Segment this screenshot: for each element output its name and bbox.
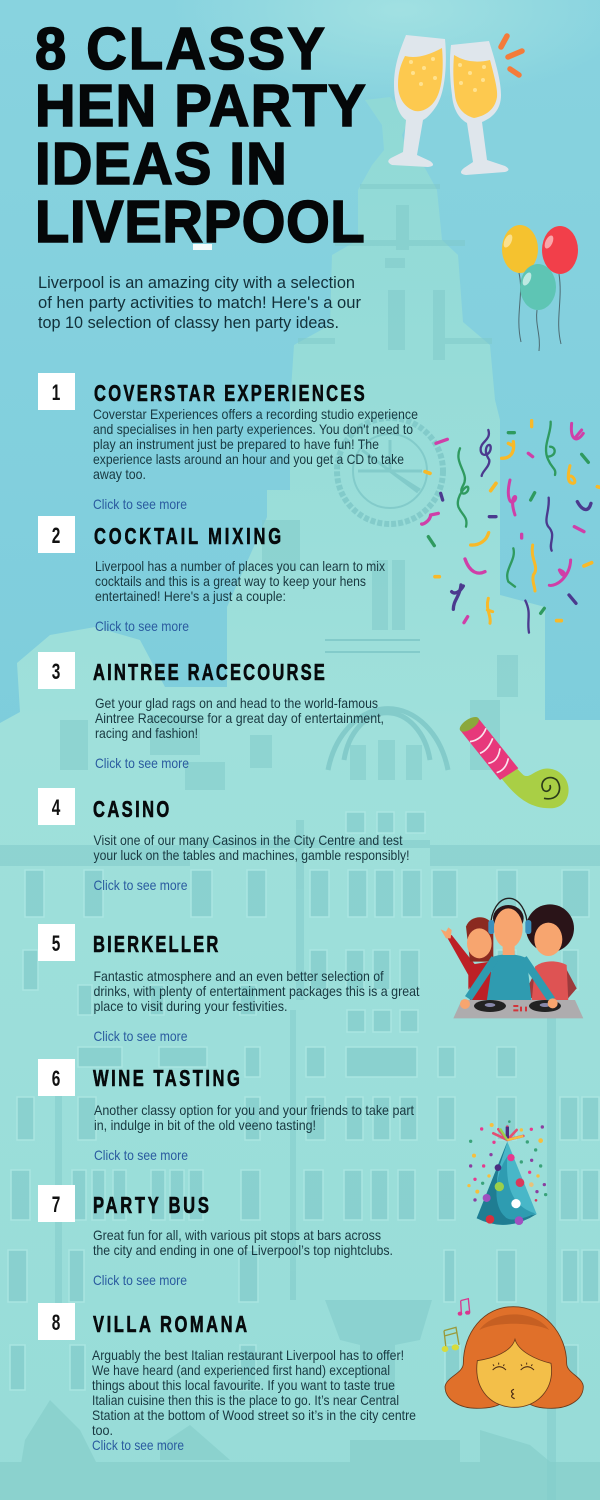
panel: 6 Wine Tasting xyxy=(38,1059,414,1163)
panel: 2 Cocktail Mixing: COCKTAIL MIXING xyxy=(94,524,281,550)
panel: 8 Villa Romana: Arguably the best Italian restaurant Liverpool has to offer! xyxy=(92,1348,404,1363)
title xyxy=(35,17,366,255)
panel: 5 Bierkeller: Fantastic atmosphere and an even better selection of xyxy=(94,969,384,984)
panel: 4 Casino: CASINO xyxy=(93,797,169,823)
panel: 7 Party Bus: PARTY BUS xyxy=(93,1193,209,1219)
panel: 8 Villa Romana: VILLA ROMANA xyxy=(93,1312,247,1338)
panel: 3 Aintree Racecourse: racing and fashion! xyxy=(95,726,198,741)
panel: 6 Wine Tasting: Click to see more xyxy=(94,1148,188,1163)
panel: 7 Party Bus: Click to see more xyxy=(93,1273,187,1288)
panel: 1 Coverstar Experiences: play an instrument just be prepared to have fun! The xyxy=(93,437,379,452)
panel: 3 Aintree Racecourse: Get your glad rags on and head to the world-famous xyxy=(95,696,378,711)
intro text: top 10 selection of classy hen party ideas. xyxy=(38,313,339,332)
panel: 3 Aintree Racecourse: 3 xyxy=(52,660,60,685)
panel: 7 Party Bus xyxy=(38,1185,393,1288)
panel: 1 Coverstar Experiences: 1 xyxy=(52,381,61,406)
icon: party hat xyxy=(467,1120,547,1225)
intro text: of hen party activities to match! Here's a our xyxy=(38,293,361,312)
panel: 2 Cocktail Mixing: Liverpool has a number of places you can learn to mix xyxy=(95,559,385,574)
panel: 2 Cocktail Mixing xyxy=(38,516,385,634)
panel: 8 Villa Romana: 8 xyxy=(52,1311,60,1336)
panel: 6 Wine Tasting: in, indulge in bit of the old veeno tasting! xyxy=(94,1118,316,1133)
panel: 5 Bierkeller: 5 xyxy=(52,932,61,957)
panel: 5 Bierkeller: BIERKELLER xyxy=(93,932,219,958)
panel: 1 Coverstar Experiences: COVERSTAR EXPERIENCES xyxy=(94,381,365,407)
panel: 1 Coverstar Experiences: away too. xyxy=(93,467,146,482)
panel: 2 Cocktail Mixing: 2 xyxy=(52,524,60,549)
panel: 5 Bierkeller: Click to see more xyxy=(94,1029,188,1044)
panel: 6 Wine Tasting: 6 xyxy=(52,1067,60,1092)
title: LIVERPOOL xyxy=(35,190,365,255)
bottom trees and railings xyxy=(0,1400,600,1500)
panel: 1 Coverstar Experiences: Click to see more xyxy=(93,497,187,512)
panel: 1 Coverstar Experiences xyxy=(38,373,418,512)
panel: 7 Party Bus: 7 xyxy=(52,1193,60,1218)
icon: party blower xyxy=(457,714,569,808)
title: HEN PARTY xyxy=(35,74,366,139)
panel: 8 Villa Romana: We have heard (and experienced first hand) exceptional xyxy=(92,1363,390,1378)
title: 8 CLASSY xyxy=(35,17,325,82)
panel: 4 Casino: your luck on the tables and machines, gamble responsibly! xyxy=(94,848,410,863)
panel: 5 Bierkeller: place to visit during your festivities. xyxy=(94,999,288,1014)
panel: 2 Cocktail Mixing: Click to see more xyxy=(95,619,189,634)
panel: 2 Cocktail Mixing: entertained! Here's a just a couple: xyxy=(95,589,286,604)
panel: 7 Party Bus: Great fun for all, with various pit stops at bars across xyxy=(93,1228,381,1243)
panel: 3 Aintree Racecourse: AINTREE RACECOURSE xyxy=(93,660,325,686)
panel: 8 Villa Romana: things about this local favourite. If you want to taste true xyxy=(92,1378,395,1393)
title: IDEAS IN xyxy=(35,132,287,197)
icon: DJ and friends xyxy=(441,898,583,1018)
panel: 3 Aintree Racecourse xyxy=(38,652,384,771)
panel: 5 Bierkeller xyxy=(38,924,420,1044)
panel: 8 Villa Romana xyxy=(38,1303,416,1453)
intro text xyxy=(38,273,361,332)
panel: 6 Wine Tasting: Another classy option for you and your friends to take part xyxy=(94,1103,414,1118)
panel: 4 Casino: Click to see more xyxy=(94,878,188,893)
panel: 8 Villa Romana: Click to see more xyxy=(92,1438,184,1453)
panel: 6 Wine Tasting: WINE TASTING xyxy=(93,1066,240,1092)
icon: champagne glasses xyxy=(388,35,522,175)
icon: woman blowing kiss with music notes xyxy=(442,1299,583,1408)
windows xyxy=(8,812,599,1390)
panel: 3 Aintree Racecourse: Aintree Racecourse for a great day of entertainment, xyxy=(95,711,384,726)
panel: 2 Cocktail Mixing: cocktails and this is a great way to keep your hens xyxy=(95,574,366,589)
panel: 4 Casino: Visit one of our many Casinos in the City Centre and test xyxy=(94,833,403,848)
panel: 1 Coverstar Experiences: experience lasts around an hour and you get a CD to take xyxy=(93,452,404,467)
icon: confetti xyxy=(422,421,600,633)
panel: 8 Villa Romana: Station at the bottom of Wood street so it’s in the city centre xyxy=(92,1408,416,1423)
panel: 5 Bierkeller: drinks, with plenty of entertainment packages this is a great xyxy=(94,984,420,999)
panel: 4 Casino: 4 xyxy=(52,796,61,821)
intro text: Liverpool is an amazing city with a selection xyxy=(38,273,355,292)
panel: 4 Casino xyxy=(38,788,410,893)
clock and arch detail xyxy=(325,418,448,770)
icon: balloons xyxy=(502,225,578,351)
panel: 7 Party Bus: the city and ending in one of Liverpool’s top nightclubs. xyxy=(93,1243,393,1258)
panel: 1 Coverstar Experiences: Coverstar Experiences offers a recording studio experience xyxy=(93,407,418,422)
panel: 3 Aintree Racecourse: Click to see more xyxy=(95,756,189,771)
panel: 1 Coverstar Experiences: and specialises in hen party experiences. You don't need to xyxy=(93,422,413,437)
panel: 8 Villa Romana: Italian cuisine then this is the place to go. It’s near Central xyxy=(92,1393,399,1408)
panel: 8 Villa Romana: too. xyxy=(92,1423,113,1438)
